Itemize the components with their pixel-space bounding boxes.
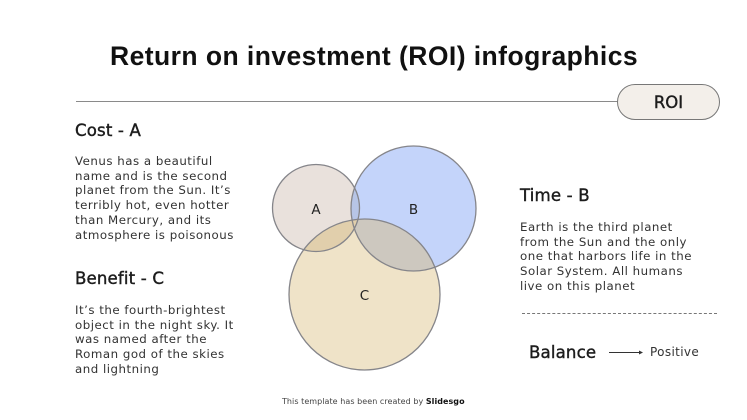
text: Cost description: than Mercury, and its <box>75 213 211 227</box>
footer credit: This template has been created by Slidesgo <box>282 397 465 406</box>
overlap A and C <box>305 220 357 251</box>
circle labels: C <box>360 288 369 304</box>
circle labels: B <box>409 202 418 218</box>
text: Benefit description: object in the night sky. It <box>75 318 234 332</box>
text: Benefit description <box>75 303 234 376</box>
label: Positive: Positive <box>650 345 699 359</box>
label: Balance: Balance <box>529 343 596 362</box>
circle C <box>289 219 440 370</box>
heading: Time - B: Time - B <box>520 186 590 205</box>
text: Cost description <box>75 154 234 242</box>
heading: Benefit - C: Benefit - C <box>75 269 164 288</box>
text: Cost description: terribly hot, even hotter <box>75 198 229 212</box>
text: Time description: from the Sun and the only <box>520 235 687 249</box>
text: Time description: live on this planet <box>520 279 635 293</box>
text: Cost description: planet from the Sun. It’s <box>75 183 231 197</box>
title: Return on investment (ROI) infographics <box>110 41 638 71</box>
circle A <box>272 164 360 252</box>
venn diagram <box>272 145 477 371</box>
heading: Cost - A: Cost - A <box>75 121 141 140</box>
text: Cost description: name and is the second <box>75 169 228 183</box>
overlap B and C <box>355 220 434 270</box>
circle B <box>351 146 476 271</box>
text: Cost description: Venus has a beautiful <box>75 154 213 168</box>
text: Benefit description: was named after the <box>75 332 207 346</box>
circle labels <box>311 202 418 304</box>
text: Time description: Solar System. All humans <box>520 264 683 278</box>
text: Benefit description: Roman god of the skies <box>75 347 225 361</box>
ROI badge: ROI <box>654 93 683 112</box>
text: Cost description: atmosphere is poisonous <box>75 228 234 242</box>
header rule <box>76 101 618 102</box>
text: Time description <box>520 220 692 293</box>
text: Time description: one that harbors life in the <box>520 249 692 263</box>
text: Time description: Earth is the third planet <box>520 220 673 234</box>
arrow <box>609 350 643 354</box>
circle outlines <box>272 146 476 370</box>
dashed divider <box>522 313 717 314</box>
overlap A and B <box>352 190 359 220</box>
text: Benefit description: It’s the fourth-brightest <box>75 303 226 317</box>
circle labels: A <box>311 202 321 218</box>
text: Benefit description: and lightning <box>75 362 159 376</box>
ROI badge <box>617 84 720 120</box>
